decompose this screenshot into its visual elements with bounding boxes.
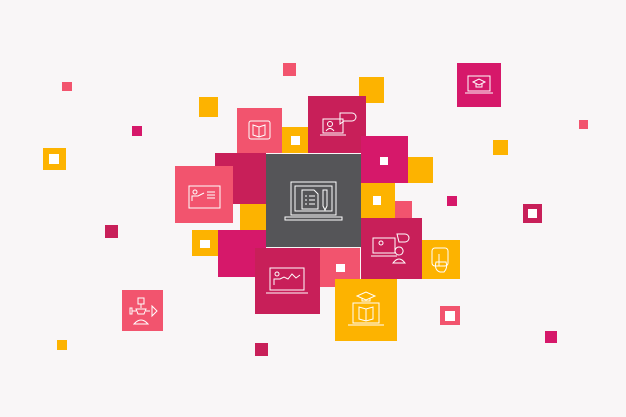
- outlined square orange: [361, 183, 395, 218]
- tile: graduation book laptop: [335, 279, 397, 341]
- small square coral right: [579, 120, 588, 129]
- center tile: laptop with document and pencil: [266, 154, 361, 247]
- tile: flow diagram: [122, 290, 163, 331]
- outlined square orange: [192, 230, 218, 256]
- tile: teacher board: [175, 166, 233, 223]
- small square crimson: [105, 225, 118, 238]
- outlined square magenta: [361, 136, 408, 183]
- tile: video chat: [361, 218, 422, 279]
- square coral: [395, 201, 412, 218]
- tile: touch gesture: [422, 240, 460, 279]
- outlined square orange: [43, 148, 66, 170]
- tile: graduation laptop top right: [457, 63, 501, 107]
- block magenta: [218, 230, 266, 277]
- small square magenta: [132, 126, 142, 136]
- small square orange right: [493, 140, 508, 155]
- square orange: [199, 97, 218, 117]
- outlined square coral: [440, 306, 460, 325]
- outlined square orange: [282, 127, 308, 153]
- outlined square coral: [320, 248, 360, 287]
- tile: lecture chart: [255, 248, 320, 314]
- small square magenta right: [447, 196, 457, 206]
- block crimson: [215, 153, 266, 204]
- block orange: [240, 204, 266, 230]
- small square coral top: [283, 63, 296, 76]
- small square coral: [62, 82, 72, 91]
- square orange: [359, 77, 384, 103]
- tile: chat laptop: [308, 96, 366, 153]
- outlined square crimson: [523, 204, 542, 223]
- small square crimson bottom: [255, 343, 268, 356]
- tile: book icon: [237, 108, 282, 153]
- square orange: [408, 157, 433, 183]
- small square magenta: [545, 331, 557, 343]
- small square orange: [57, 340, 67, 350]
